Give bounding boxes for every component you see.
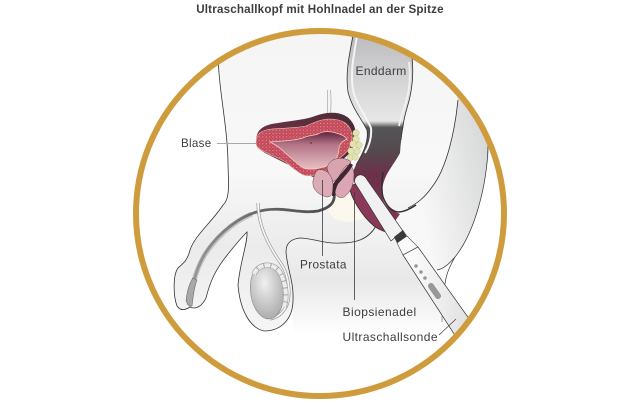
label: Prostata xyxy=(300,180,347,272)
body silhouette xyxy=(174,30,490,340)
maroon wedge xyxy=(350,184,385,232)
bladder xyxy=(256,113,356,177)
testicle xyxy=(248,261,286,321)
label: Enddarm: Enddarm xyxy=(356,64,407,78)
illustration: pelvic anatomy xyxy=(174,30,490,340)
label: Blase: Blase xyxy=(181,137,212,150)
label: Biopsienadel xyxy=(342,192,417,319)
label: Ultraschallsonde xyxy=(342,319,456,344)
bladder lumen xyxy=(270,132,347,169)
title: Ultraschallkopf mit Hohlnadel an der Spitze xyxy=(196,3,444,16)
dark rectal outline xyxy=(382,172,416,212)
label: Prostata: Prostata xyxy=(300,258,347,272)
label: Biopsienadel: Biopsienadel xyxy=(342,305,417,319)
contour lines xyxy=(174,64,376,331)
seminal vesicles xyxy=(347,130,362,161)
vas deferens tube xyxy=(258,203,289,319)
label: Blase xyxy=(181,137,256,150)
label: Ultraschallsonde: Ultraschallsonde xyxy=(342,330,438,344)
probe xyxy=(355,175,470,340)
ureter tube xyxy=(327,90,331,114)
gold ring xyxy=(136,31,504,396)
prostate xyxy=(313,158,354,198)
warm glow xyxy=(328,196,364,222)
rectum xyxy=(347,30,416,232)
urethra and penis duct xyxy=(186,192,334,306)
